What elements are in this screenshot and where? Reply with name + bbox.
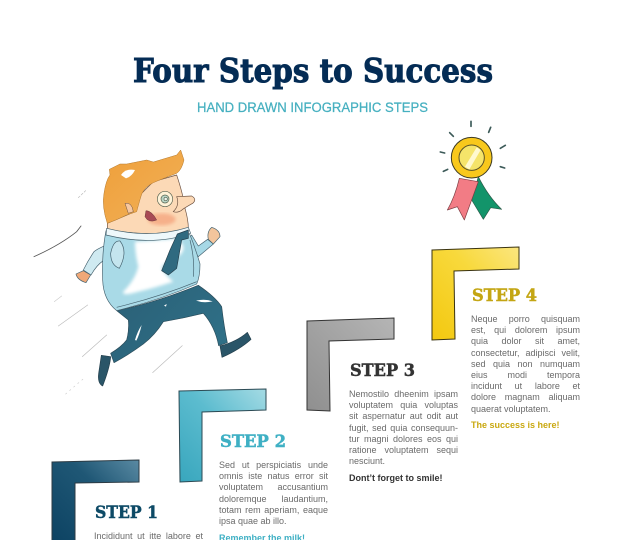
- step 4 text: dolore magnam aliquam: [471, 392, 580, 402]
- ear: [125, 203, 133, 213]
- green ribbon: [472, 177, 502, 219]
- step 3 text: voluptatem quia voluptas: [349, 400, 458, 410]
- cheek: [148, 213, 176, 225]
- step 2 text: Sed ut perspiciatis unde: [219, 460, 328, 470]
- step 3 text: tur magni dolores eos qui: [349, 434, 458, 444]
- collar: [106, 227, 191, 240]
- sleeve: [111, 241, 124, 268]
- step 3 text: Nemostilo dheenim ipsam: [349, 389, 458, 399]
- arms: [76, 227, 220, 283]
- step 4 text: Neque porro quisquam: [471, 314, 580, 324]
- gold disc: [451, 137, 492, 178]
- step 2 bracket: [179, 389, 266, 482]
- eye: [157, 191, 173, 207]
- step 3 text: nesciunt.: [349, 456, 385, 466]
- head: [107, 175, 188, 234]
- step 3 text: sit aspernatur aut odit aut: [349, 411, 458, 421]
- step 3 text: fugit, sed quia consequun-: [349, 423, 458, 433]
- hair highlight: [121, 170, 135, 178]
- step 4 text: est, qui dolorem ipsum: [471, 325, 580, 335]
- step 2 heading: STEP 2: [220, 432, 286, 452]
- subtitle: HAND DRAWN INFOGRAPHIC STEPS: [197, 100, 428, 115]
- step 4 text: [471, 314, 580, 414]
- icon: medal with ribbons: [440, 120, 506, 220]
- step 2 text: doloremque laudantium,: [219, 494, 328, 504]
- step 3 heading: STEP 3: [350, 361, 415, 381]
- step 1 heading: STEP 1: [95, 503, 158, 523]
- inner disc: [459, 145, 484, 170]
- shirt body: [102, 231, 200, 311]
- shirt white highlight: [123, 238, 183, 294]
- step 2 text: omnis iste natus error sit: [219, 471, 328, 481]
- step 4 heading: STEP 4: [472, 286, 537, 306]
- panel: step 3: [306, 318, 458, 483]
- step 3 bracket: [307, 318, 394, 411]
- step 2 text: ipsa quae ab illo.: [219, 516, 287, 526]
- step 2 text: [219, 460, 328, 526]
- hair: [103, 150, 184, 223]
- step 1 bracket: [52, 460, 139, 540]
- panel: step 1: [52, 460, 203, 540]
- step 3 note: Dont’t forget to smile!: [349, 473, 442, 483]
- shoes: [98, 332, 251, 386]
- trousers: [111, 285, 227, 363]
- step 4 text: quia dolor sit amet,: [471, 336, 580, 346]
- step 4 text: quaerat voluptatem.: [471, 404, 551, 414]
- mouth: [145, 211, 157, 221]
- step 3 text: [349, 389, 458, 466]
- step 4 text: incidunt ut labore et: [471, 381, 580, 391]
- step 4 text: sed quia non numquam: [471, 359, 580, 369]
- illustration: running businessman: [34, 150, 252, 394]
- disc shine: [465, 147, 481, 169]
- pink ribbon: [447, 178, 478, 220]
- step 2 text: voluptatem accusantium: [219, 482, 328, 492]
- trouser highlights: [135, 300, 213, 341]
- step 2 text: totam rem aperiam, eaque: [219, 505, 328, 515]
- panel: step 2: [178, 388, 328, 540]
- speed lines: [34, 191, 182, 394]
- tie: [162, 230, 188, 275]
- step 4 note: The success is here!: [471, 420, 560, 430]
- rays: [440, 121, 505, 171]
- step 4 bracket: [432, 247, 519, 340]
- shirt buttons line and hem: [117, 240, 197, 307]
- panel: step 4: [432, 246, 580, 430]
- step 3 text: ratione voluptatem sequi: [349, 445, 458, 455]
- step 4 text: eius modi tempora: [471, 370, 580, 380]
- nose: [173, 196, 195, 212]
- step 4 text: consectetur, adipisci velit,: [471, 348, 580, 358]
